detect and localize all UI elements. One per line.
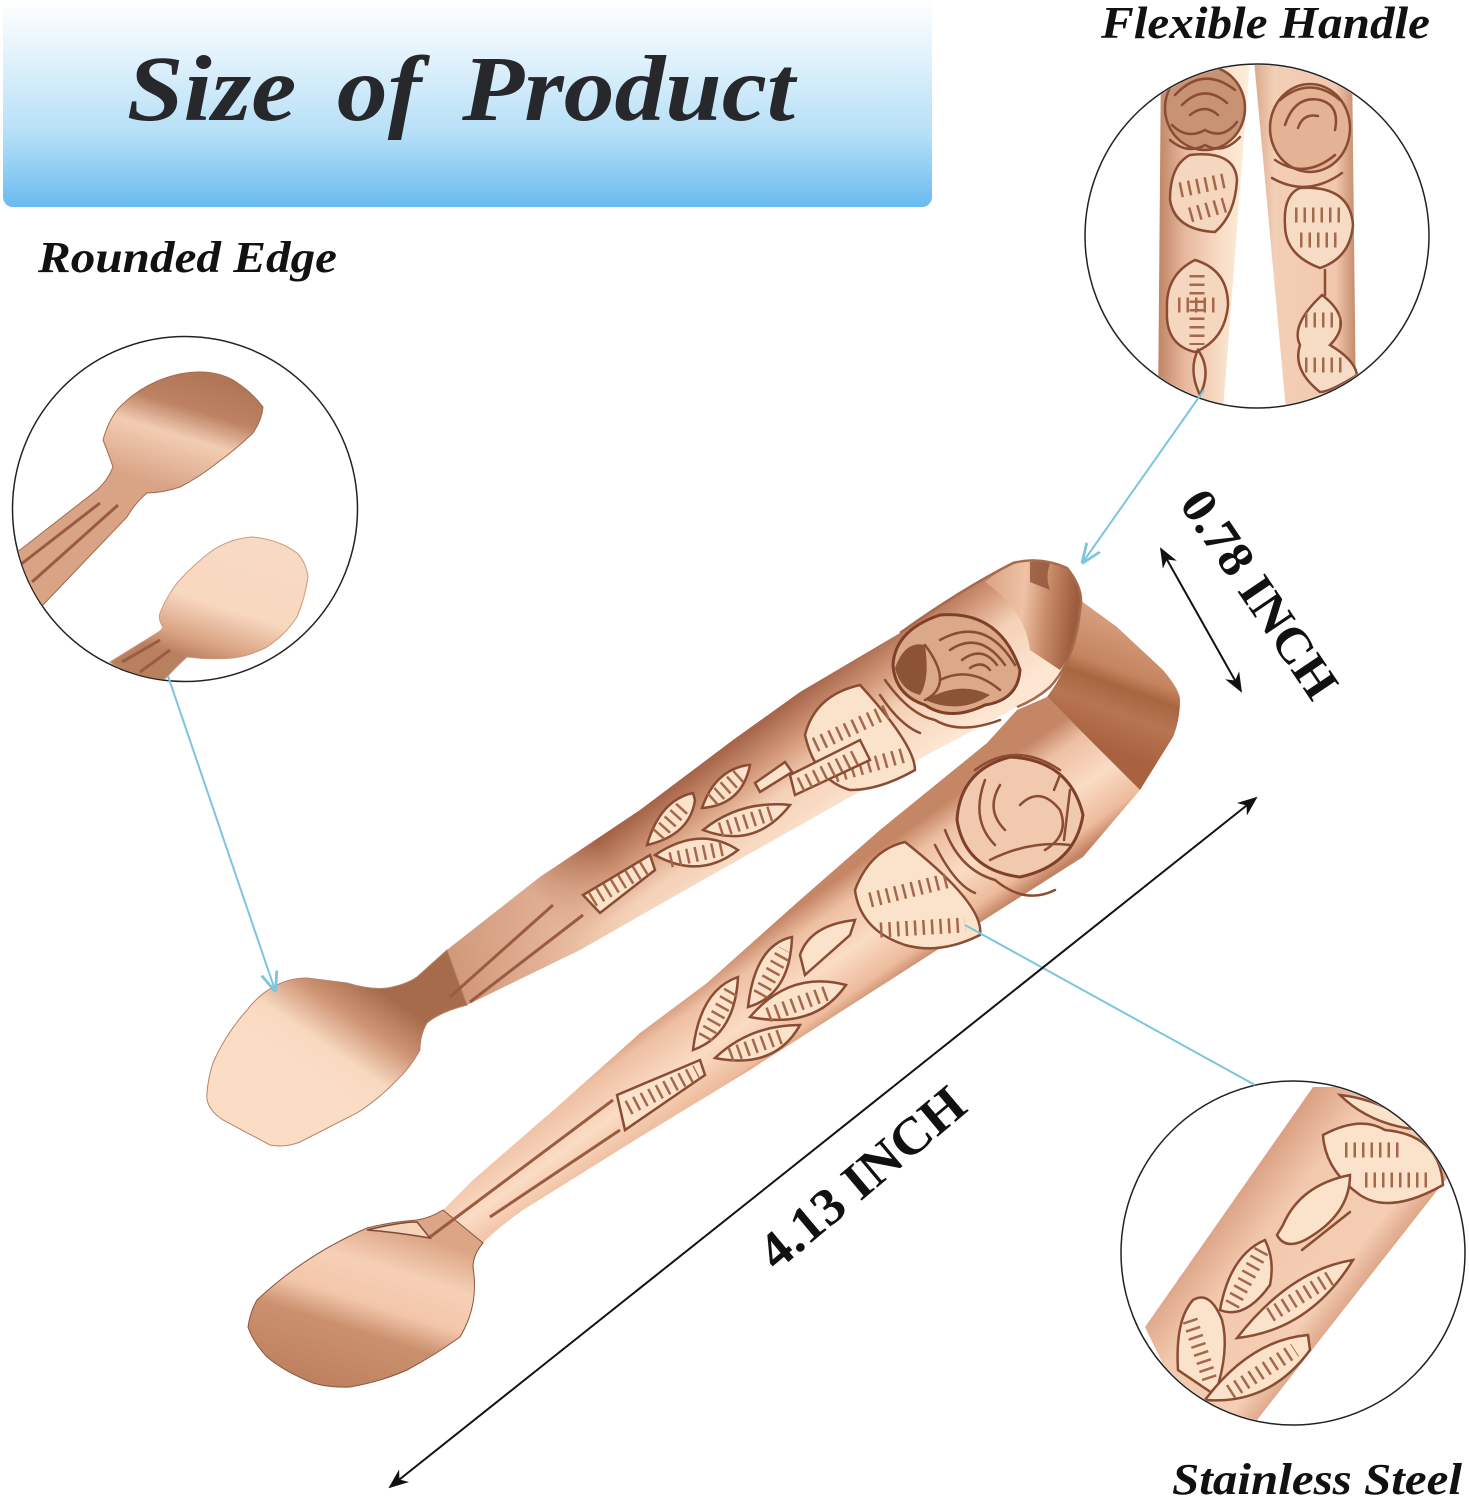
detail circle: stainless steel (1121, 1081, 1469, 1425)
tongs: bend (1047, 600, 1180, 790)
tongs: bend rim (900, 560, 1081, 707)
tongs (207, 560, 1180, 1387)
dimension label: length: 4.13 INCH (747, 1076, 977, 1281)
detail circle: rounded edge (10, 336, 358, 690)
title: Size of Product (127, 38, 798, 141)
tongs: lower rose (935, 755, 1083, 896)
dimension arrow: length (390, 798, 1256, 1487)
tongs: upper rose (880, 615, 1020, 733)
detail circle: flexible handle (1085, 60, 1429, 410)
tongs: lower arm and spoon (248, 697, 1140, 1387)
leader line: rounded edge (168, 676, 275, 990)
dimension arrow: width (1161, 549, 1241, 691)
tongs: lower leaf cluster by rose (855, 842, 980, 948)
title banner (3, 0, 932, 207)
leader line: flexible handle (1083, 390, 1204, 562)
tongs: upper arm and spoon (207, 560, 1081, 1146)
tongs: lower arm leaves (617, 920, 855, 1130)
label: rounded edge: Rounded Edge (37, 233, 337, 282)
tongs: upper leaf cluster by rose (805, 685, 915, 790)
leader line: stainless steel (965, 925, 1255, 1085)
tongs: upper arm leaves (583, 740, 870, 913)
dimension label: width: 0.78 INCH (1169, 479, 1350, 709)
